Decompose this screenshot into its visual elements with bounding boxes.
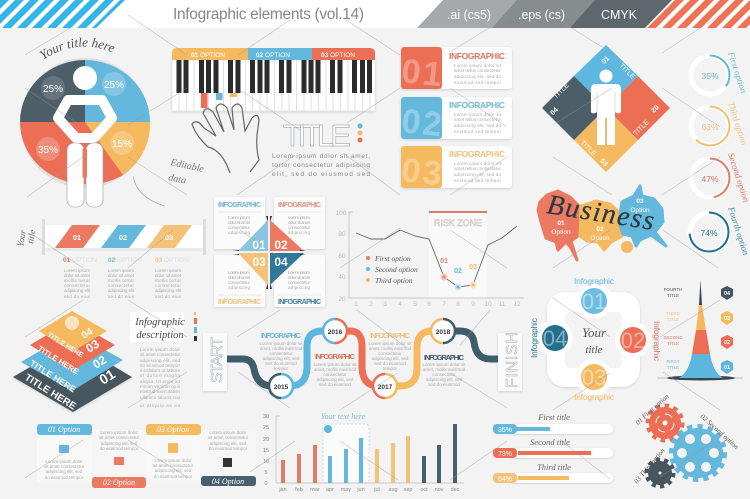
chart: mountain stacked peak: TITLE — [667, 365, 679, 370]
panel: timeline road: tempor — [274, 366, 288, 371]
panel: ribbon options: 01 OPTION — [63, 257, 97, 264]
panel: option boxes: Lorem ipsum dolor — [154, 458, 192, 463]
header stripes: blue — [0, 0, 125, 28]
note: editable data: data — [167, 172, 187, 187]
panel: timeline road: sed do eiusmod — [374, 361, 406, 366]
chart: progress bars: 78% — [498, 451, 512, 458]
panel: ribbon options: 03 — [165, 233, 173, 242]
chart: risk zone line chart: 5 — [413, 301, 417, 308]
panel: ribbon options: adipiscing elit — [155, 288, 182, 293]
chart: risk zone line chart: 40 — [338, 274, 346, 281]
chart: monthly bar chart: 25 — [263, 425, 269, 431]
icon: gears: 01 First option — [634, 392, 671, 426]
chart: risk zone line chart: 10 — [484, 301, 492, 308]
panel: four quadrant triangles: consectetur — [228, 225, 250, 230]
panel: business splash: Business — [545, 189, 657, 237]
panel: isometric layers: TITLE HERE — [28, 358, 78, 395]
chart: monthly bar chart: 0 — [264, 481, 268, 487]
chart: risk zone line chart: 8 — [456, 301, 460, 308]
panel: person diamond: TITLE — [618, 62, 636, 81]
chart: mountain stacked peak: 04 — [724, 291, 731, 297]
panel: ribbon options: sed do eius — [155, 294, 182, 299]
panel: timeline road: consectetur — [323, 372, 347, 377]
panel: isometric layers: TITLE HERE — [46, 332, 85, 360]
panel: timeline road: Lorem ipsum dolor sit — [368, 341, 412, 346]
panel: ribbon options: dolor sit amet — [155, 273, 182, 278]
panel: numbered card 01: INFOGRAPHIC — [449, 51, 505, 61]
panel: numbered card 02: adipiscing elit, sed do — [454, 123, 501, 128]
panel: person diamond: TITLE — [552, 82, 571, 100]
chart: mountain stacked peak: TITLE — [667, 317, 679, 322]
icon: gears: 03 Third option — [632, 446, 667, 485]
panel: circular process: Your — [582, 325, 607, 340]
panel: timeline road: adipiscing elit, sed — [372, 356, 409, 361]
text block: infographic description: ullamco laboris nisi — [140, 395, 180, 400]
panel: option boxes: sit amet consectetur — [44, 464, 85, 469]
chart: monthly bar chart: aug — [388, 487, 398, 493]
chart: risk zone line chart: 11 — [499, 301, 506, 308]
chart: risk zone line chart: 80 — [338, 231, 346, 238]
panel: timeline road: INFOGRAPHIC — [315, 352, 356, 361]
panel: option boxes: sit amet consectetur — [208, 435, 249, 440]
panel: four quadrant triangles: Lorem ipsum — [288, 270, 310, 275]
text block: infographic description: minim veniam quis — [140, 384, 181, 389]
panel: option boxes: 04 Option — [212, 477, 244, 486]
chart: ring 47%: 47% — [701, 174, 719, 184]
text block: infographic description — [130, 312, 185, 408]
chart: monthly bar chart: 5 — [264, 470, 268, 476]
panel: business splash: 03 — [636, 198, 644, 205]
panel: four quadrant triangles: adipiscing — [228, 285, 250, 290]
text block: infographic description: sit amet consectetur — [140, 352, 180, 357]
chart: mountain stacked peak: THIRD — [666, 311, 681, 316]
panel: ribbon options: 02 — [119, 233, 127, 242]
panel: timeline road: 2015 — [274, 384, 289, 391]
chart: monthly bar chart: nov — [435, 487, 444, 493]
panel: person diamond: TITLE — [632, 119, 651, 137]
panel: person pie chart: 25% — [104, 80, 124, 91]
text block: title with dots: Lorem ipsum dolor sit amet, — [272, 153, 370, 160]
panel: person diamond: 04 — [549, 107, 560, 117]
chart: monthly bar chart: 20 — [263, 437, 269, 443]
panel: four quadrant triangles: 02 — [274, 238, 288, 252]
chart: ring 63%: 63% — [701, 122, 719, 132]
text block: title with dots: TITLE — [283, 118, 351, 153]
chart: mountain stacked peak: 01 — [724, 365, 730, 371]
panel: option boxes: sit amet consectetur — [99, 435, 140, 440]
panel: isometric layers — [13, 311, 132, 413]
panel: ribbon options: Lorem ipsum — [155, 268, 181, 273]
panel: business splash: Option — [551, 229, 571, 236]
panel: four quadrant triangles: 04 — [274, 255, 288, 269]
format tabs: .ai (cs5) — [447, 8, 491, 22]
side label: your title second line: title — [25, 229, 37, 244]
panel: ribbon options: dolor sit amet — [64, 273, 91, 278]
panel: numbered card 03: amet tellus consectetur — [454, 166, 502, 171]
panel: four quadrant triangles: adipiscing — [288, 230, 310, 235]
chart: monthly bar chart: 30 — [263, 414, 269, 420]
note: editable data — [133, 157, 205, 206]
panel: ribbon options: mollis tortor — [64, 278, 90, 283]
panel: isometric layers: 03 — [83, 336, 102, 356]
panel: person pie chart: Your title here — [39, 38, 114, 60]
panel: option boxes: adipiscing elit, sed — [101, 441, 138, 446]
chart: mountain stacked peak: FOURTH — [664, 287, 682, 292]
panel: circular process: Infographic — [574, 392, 615, 402]
chart: progress bars: 35% — [498, 427, 512, 434]
panel: person pie chart: 15% — [112, 139, 132, 150]
panel: option boxes: adipiscing elit, sed — [155, 468, 192, 473]
panel: numbered card 02: Lorem ipsum dolor sit — [454, 112, 502, 117]
chart: ring 74% — [690, 205, 750, 257]
panel: four quadrant triangles: adipiscing — [228, 230, 250, 235]
panel: timeline road: INFOGRAPHIC — [370, 331, 411, 340]
panel: isometric layers: TITLE HERE — [22, 372, 78, 413]
panel: business splash — [538, 186, 666, 260]
panel: circular process — [529, 276, 662, 402]
panel: option boxes: Lorem ipsum dolor — [45, 459, 83, 464]
panel: circular process: 02 — [621, 328, 645, 353]
chart: monthly bar chart: jul — [373, 487, 380, 493]
panel: ribbon options: consectetur — [108, 283, 134, 288]
panel: person pie chart: 25% — [43, 84, 63, 95]
chart: monthly bar chart — [263, 412, 464, 493]
panel: timeline road: amet, mollis euismod — [369, 346, 412, 351]
panel: circular process: 03 — [582, 365, 606, 390]
panel: option boxes: adipiscing elit, sed — [210, 441, 247, 446]
panel: four quadrant triangles — [214, 197, 325, 307]
chart: monthly bar chart: Your text here — [321, 412, 366, 421]
text block: infographic description: aliqua. Ut enim ad — [140, 379, 180, 384]
text block: title with dots: tortor consectetur adipiscing — [272, 162, 370, 169]
panel: isometric layers: 01 — [96, 366, 118, 388]
panel: four quadrant triangles: adipiscing — [288, 285, 310, 290]
panel: timeline road: 2017 — [378, 384, 393, 391]
chart: ring 63%: Third option — [726, 101, 750, 147]
panel: ribbon options: sed do eius — [108, 294, 135, 299]
panel: ribbon options: sed do eius — [64, 294, 91, 299]
panel: four quadrant triangles: Lorem ipsum — [228, 215, 250, 220]
chart: risk zone line chart: 2 — [369, 301, 373, 308]
chart: ring 63% — [690, 101, 750, 147]
panel: numbered card 03: eiusmod sed tempor — [454, 178, 502, 183]
chart: monthly bar chart: dec — [451, 487, 460, 493]
panel: timeline road: FINISH — [504, 332, 521, 388]
panel: timeline road: adipiscing elit, sed — [426, 377, 463, 382]
chart: risk zone line chart: 12 — [513, 301, 521, 308]
panel: isometric layers: 04 — [80, 326, 95, 342]
chart: risk zone line chart: First option — [374, 254, 411, 263]
text block: infographic description: adipiscing elit, sed — [140, 358, 180, 363]
panel: option boxes: Lorem ipsum dolor — [209, 430, 247, 435]
chart: risk zone line chart: 1 — [354, 301, 358, 308]
chart: risk zone line chart: 4 — [398, 301, 402, 308]
chart: ring 35% — [690, 50, 749, 95]
note: editable data: Editable — [168, 157, 205, 175]
panel: option boxes: adipiscing elit, sed — [46, 469, 83, 474]
chart: risk zone line chart: 03 — [469, 264, 477, 271]
color key — [194, 312, 197, 341]
chart: mountain stacked peak: 03 — [724, 316, 730, 322]
chart: monthly bar chart: apr — [326, 487, 334, 493]
panel: numbered card 03: adipiscing elit, sed do — [454, 172, 501, 177]
chart: risk zone line chart: 9 — [471, 301, 475, 308]
panel: numbered card 01: Lorem ipsum dolor sit — [454, 63, 502, 68]
panel: ribbon options: 02 OPTION — [108, 257, 142, 264]
panel: four quadrant triangles: dolor sit amet — [288, 220, 311, 225]
panel: numbered card 01: amet tellus consectetur — [454, 68, 502, 73]
panel: four quadrant triangles: 01 — [252, 238, 266, 252]
panel: ribbon options: consectetur — [64, 283, 90, 288]
chart: mountain stacked peak: TITLE — [667, 293, 679, 298]
text block: infographic description: incididunt ut labore — [140, 368, 180, 373]
panel: timeline road: Lorem ipsum dolor sit — [259, 341, 303, 346]
panel: option boxes: 03 Option — [157, 425, 189, 434]
chart: risk zone line chart: 02 — [454, 268, 462, 275]
panel: ribbon options: 03 OPTION — [155, 257, 189, 264]
panel: four quadrant triangles: INFOGRAPHIC — [218, 202, 261, 209]
panel: business splash: Option — [590, 235, 610, 242]
panel: numbered card 01 — [400, 47, 512, 94]
side label: your title: Your — [15, 229, 28, 247]
panel: timeline road — [203, 319, 522, 398]
panel: timeline road: consectetur — [269, 351, 293, 356]
panel: person diamond: TITLE — [579, 139, 597, 158]
panel: timeline road: 2018 — [436, 329, 451, 336]
panel: option boxes — [37, 424, 256, 488]
chart: ring 74%: 74% — [700, 228, 718, 238]
panel: timeline road: START — [209, 337, 226, 383]
page title: Infographic elements (vol.14) — [173, 6, 364, 23]
chart: mountain stacked peak: 02 — [724, 340, 730, 346]
panel: circular process: title — [585, 344, 603, 356]
panel: four quadrant triangles: 03 — [252, 255, 266, 269]
panel: option boxes: do eiusmod tempor — [100, 446, 139, 451]
panel: piano keyboard: 02 OPTION — [256, 52, 290, 59]
text block: infographic description: et dolore magna — [140, 373, 180, 378]
chart: progress bars — [493, 412, 613, 483]
panel: business splash: Option — [630, 207, 650, 214]
panel: numbered card 01: 01 — [400, 52, 444, 94]
panel: timeline road: 2016 — [328, 329, 343, 336]
chart: monthly bar chart: 10 — [263, 459, 269, 465]
header stripes: red — [645, 0, 750, 28]
chart: monthly bar chart: mar — [310, 487, 320, 493]
chart: progress bars: 54% — [498, 476, 512, 483]
panel: numbered card 02: amet tellus consectetur — [454, 117, 502, 122]
panel: circular process: Infographic — [529, 317, 539, 358]
text block: infographic description: nostrud exercitation — [140, 389, 180, 394]
panel: timeline road: sed do eiusmod — [265, 361, 297, 366]
panel: timeline road: INFOGRAPHIC — [424, 353, 465, 362]
panel: ribbon options: consectetur — [155, 283, 182, 288]
chart: risk zone line chart: 20 — [338, 296, 346, 303]
format tabs — [417, 0, 672, 28]
panel: timeline road: sed do eiusmod — [428, 382, 460, 387]
panel: person diamond: 03 — [598, 158, 609, 168]
chart: monthly bar chart: may — [341, 487, 351, 493]
chart: mountain stacked peak: SECOND — [663, 335, 683, 340]
chart: monthly bar chart: jun — [356, 487, 365, 493]
panel: ribbon options: mollis tortor — [108, 278, 134, 283]
text block: title with dots — [272, 118, 370, 178]
panel: numbered card 02 — [400, 97, 512, 144]
panel: timeline road: amet, mollis euismod — [260, 346, 303, 351]
panel: four quadrant triangles: Lorem ipsum — [288, 215, 310, 220]
panel: numbered card 03: Lorem ipsum dolor sit — [454, 161, 502, 166]
chart: monthly bar chart: feb — [295, 487, 303, 493]
panel: circular process: Infographic — [574, 276, 615, 286]
text block: title with dots: elit, sed do eiusmod sed — [272, 171, 370, 178]
chart: risk zone line chart: 01 — [440, 258, 448, 265]
chart: risk zone line chart: 100 — [336, 210, 347, 217]
panel: four quadrant triangles: consectetur — [288, 280, 310, 285]
chart: mountain stacked peak: TITLE — [667, 341, 679, 346]
panel: timeline road: INFOGRAPHIC — [261, 331, 302, 340]
panel: four quadrant triangles: consectetur — [228, 280, 250, 285]
panel: numbered card 03 — [400, 146, 512, 193]
chart: progress bars: First title — [537, 412, 570, 422]
panel: option boxes: Lorem ipsum dolor — [100, 430, 138, 435]
text block: infographic description: Lorem ipsum dolor — [140, 347, 180, 352]
panel: four quadrant triangles: Lorem ipsum — [228, 270, 250, 275]
chart: risk zone line chart: Third option — [375, 276, 413, 285]
panel: timeline road: amet, mollis euismod — [314, 367, 357, 372]
chart: monthly bar chart: 15 — [263, 448, 269, 454]
format tabs: CMYK — [601, 8, 638, 22]
chart: ring 47% — [690, 152, 750, 204]
chart: risk zone line chart: 7 — [442, 301, 446, 308]
chart: progress bars: Second title — [530, 437, 570, 447]
text block: infographic description: do eiusmod tempor — [140, 363, 180, 368]
panel: timeline road: sed do eiusmod — [319, 382, 351, 387]
panel: numbered card 03: 03 — [400, 151, 444, 193]
chart: risk zone line chart: RISK ZONE — [434, 218, 482, 228]
panel: person diamond: 01 — [601, 55, 611, 66]
panel: numbered card 01: eiusmod sed tempor — [454, 80, 502, 85]
chart: risk zone line chart: 3 — [383, 301, 387, 308]
chart: mountain stacked peak — [657, 280, 743, 380]
panel: timeline road: consectetur — [378, 351, 402, 356]
panel: option boxes: sit amet consectetur — [153, 463, 194, 468]
chart: progress bars: Third title — [537, 462, 571, 472]
panel: option boxes: 01 Option — [48, 425, 80, 434]
panel: four quadrant triangles: consectetur — [288, 225, 310, 230]
panel: timeline road: Lorem ipsum dolor sit — [422, 362, 466, 367]
panel: ribbon options: adipiscing elit — [108, 288, 135, 293]
icon: gears: 02 Second option — [699, 413, 741, 451]
panel: four quadrant triangles: dolor sit amet — [288, 275, 311, 280]
panel: numbered card 02: INFOGRAPHIC — [449, 100, 505, 110]
chart: risk zone line chart: 6 — [427, 301, 431, 308]
panel: numbered card 03: INFOGRAPHIC — [449, 149, 505, 159]
panel: person pie chart — [20, 38, 150, 208]
panel: four quadrant triangles: INFOGRAPHIC — [278, 299, 321, 306]
panel: business splash: 02 — [596, 226, 604, 233]
panel: circular process: Infographic — [652, 321, 662, 362]
text block: infographic description: description — [136, 330, 184, 341]
panel: timeline road: amet, mollis euismod — [423, 367, 466, 372]
panel: piano keyboard — [172, 48, 375, 111]
chart: monthly bar chart: jan — [278, 487, 287, 493]
panel: ribbon options: adipiscing elit — [64, 288, 91, 293]
text block: infographic description: ut aliquip ex ea — [140, 403, 180, 408]
panel: numbered card 02: eiusmod sed tempor — [454, 129, 502, 134]
panel: timeline road: tempor — [383, 366, 397, 371]
panel: timeline road: adipiscing elit, sed — [263, 356, 300, 361]
format tabs: .eps (cs) — [518, 8, 565, 22]
panel: option boxes: do eiusmod tempor — [209, 446, 248, 451]
chart: ring 35%: First option — [726, 50, 749, 95]
panel: timeline road: Lorem ipsum dolor sit — [313, 362, 357, 367]
panel: option boxes: do eiusmod tempor — [45, 475, 84, 480]
panel: four quadrant triangles: INFOGRAPHIC — [218, 299, 261, 306]
chart: monthly bar chart: sep — [404, 487, 412, 493]
panel: four quadrant triangles: dolor sit amet — [228, 275, 251, 280]
panel: ribbon options: Lorem ipsum — [108, 268, 134, 273]
panel: ribbon options: Lorem ipsum — [64, 268, 90, 273]
icon: hand outline — [192, 104, 259, 173]
panel: circular process: 01 — [582, 289, 606, 314]
panel: four quadrant triangles: dolor sit amet — [228, 220, 251, 225]
chart: risk zone line chart — [336, 210, 524, 308]
panel: piano keyboard: 01 OPTION — [191, 52, 225, 59]
chart: monthly bar chart: oct — [420, 487, 428, 493]
panel: ribbon options: 01 — [73, 233, 81, 242]
panel: person pie chart: 35% — [38, 145, 58, 156]
panel: option boxes: 02 Option — [103, 478, 135, 487]
panel: person diamond: 02 — [649, 103, 660, 113]
panel: numbered card 02: 02 — [400, 102, 444, 144]
panel: circular process: 04 — [543, 326, 567, 351]
panel: person diamond — [542, 45, 670, 172]
panel: timeline road: consectetur — [432, 372, 456, 377]
panel: isometric layers: 02 — [90, 352, 109, 372]
panel: option boxes: do eiusmod tempor — [154, 474, 193, 479]
icon: gears — [632, 392, 741, 486]
panel: ribbon options: mollis tortor — [155, 278, 182, 283]
panel: timeline road: adipiscing elit, sed — [317, 377, 354, 382]
chart: ring 35%: 35% — [701, 71, 719, 81]
chart: risk zone line chart: Second option — [375, 265, 418, 274]
panel: isometric layers: TITLE HERE — [36, 344, 81, 377]
panel: business splash: 01 — [557, 220, 565, 227]
panel: ribbon options — [42, 219, 206, 299]
chart: risk zone line chart: 60 — [338, 253, 346, 260]
chart: mountain stacked peak: FIRST — [666, 359, 680, 364]
panel: piano keyboard: 03 OPTION — [321, 52, 355, 59]
text block: infographic description: Infographic — [134, 317, 185, 328]
panel: four quadrant triangles: INFOGRAPHIC — [278, 202, 321, 209]
panel: numbered card 01: adipiscing elit, sed do — [454, 74, 501, 79]
panel: ribbon options: dolor sit amet — [108, 273, 135, 278]
